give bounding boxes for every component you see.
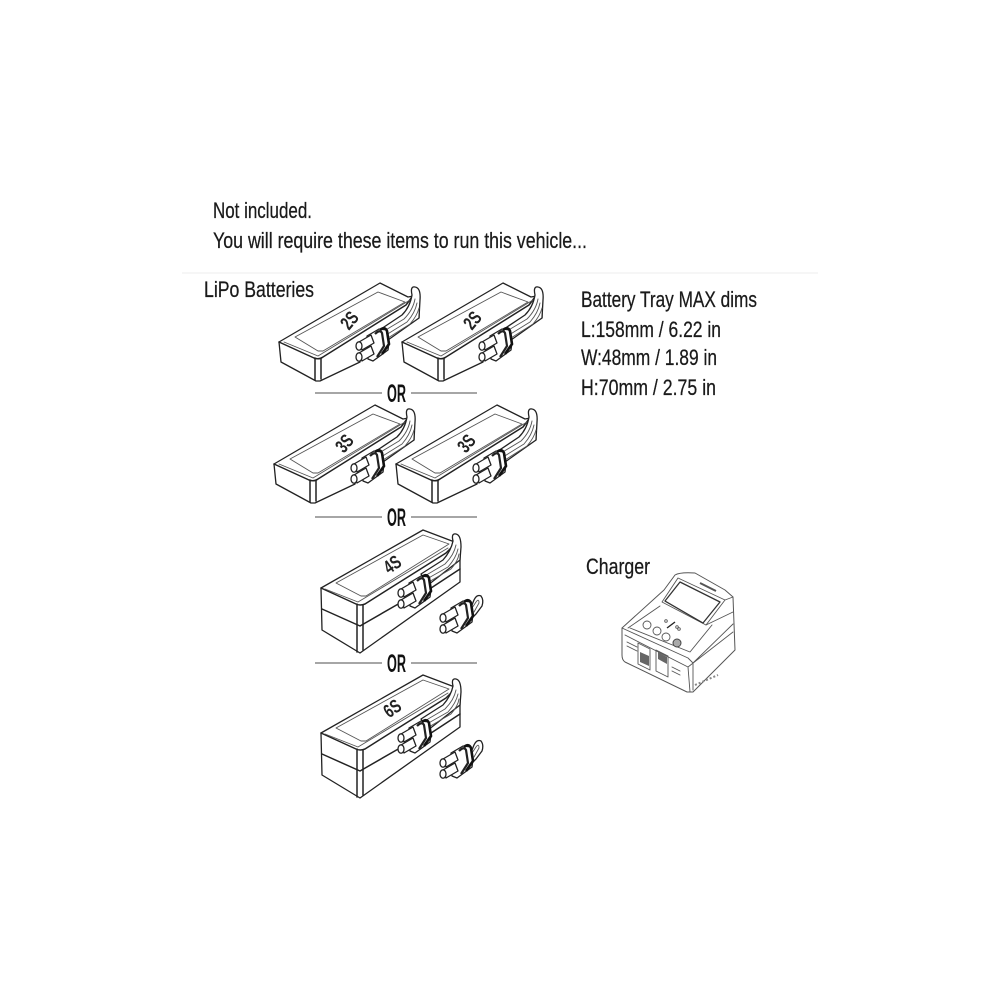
divider: OR 3: OR	[387, 650, 406, 678]
heading: not included	[213, 198, 587, 253]
battery: 3S right: 3S	[453, 430, 480, 457]
heading: not included: Not included.	[213, 198, 312, 223]
battery: 3S right	[396, 405, 537, 503]
ports	[627, 642, 680, 677]
heading: LiPo Batteries: LiPo Batteries	[204, 277, 314, 302]
battery: 3S left: 3S	[331, 430, 358, 457]
battery: 2S right: 2S	[459, 307, 486, 334]
panel: battery tray dimensions: W:48mm / 1.89 in	[581, 345, 717, 370]
battery: 4S	[321, 530, 461, 653]
icon: charger	[622, 573, 735, 692]
connector: 4S loose	[440, 596, 483, 633]
battery: 2S left: 2S	[336, 307, 363, 334]
connector: 6S loose	[440, 740, 483, 778]
battery: 6S: 6S	[379, 695, 406, 722]
divider: OR 1: OR	[387, 380, 406, 408]
battery: 4S: 4S	[379, 551, 406, 578]
battery: 6S	[321, 675, 461, 798]
battery: 3S left	[274, 405, 415, 503]
divider: OR 2: OR	[387, 504, 406, 532]
heading: not included: You will require these items to run this vehicle...	[213, 228, 587, 253]
panel: battery tray dimensions: Battery Tray MAX dims	[581, 287, 757, 312]
battery: 2S left	[279, 283, 420, 381]
heading: Charger: Charger	[586, 554, 650, 579]
panel: battery tray dimensions: L:158mm / 6.22 in	[581, 317, 721, 342]
panel: battery tray dimensions	[581, 287, 757, 400]
panel: battery tray dimensions: H:70mm / 2.75 in	[581, 375, 716, 400]
buttons	[643, 620, 681, 647]
battery: 2S right	[402, 283, 543, 381]
